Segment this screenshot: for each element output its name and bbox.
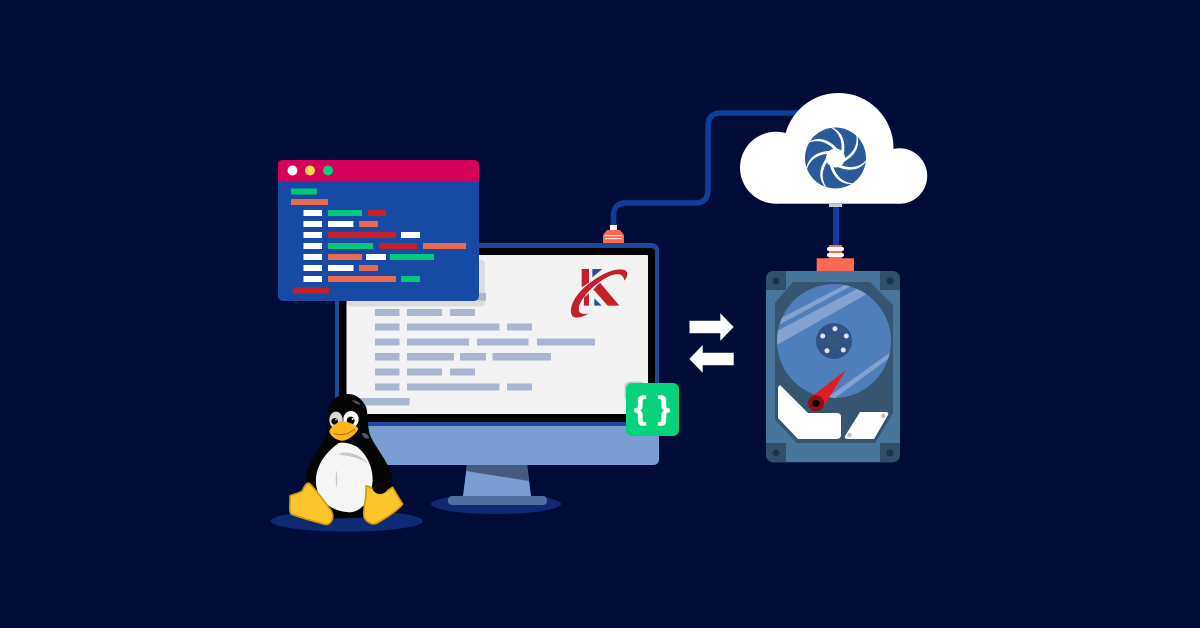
cable: cloud to hard drive <box>827 204 844 259</box>
window buttons <box>288 166 333 176</box>
cloud shape <box>740 93 927 204</box>
penguin left foot <box>290 483 333 524</box>
penguin <box>271 394 423 532</box>
window body <box>278 160 479 301</box>
penguin flipper tip <box>373 482 387 494</box>
corner mounts <box>766 271 900 462</box>
monitor screen <box>346 255 648 414</box>
screen text lines <box>355 293 595 406</box>
belly shading <box>335 453 368 488</box>
badge: curly braces: { } <box>634 390 671 426</box>
monitor stand <box>448 464 547 505</box>
logo: K with swoosh <box>571 269 627 318</box>
penguin beak <box>329 421 358 441</box>
magnet plate <box>845 412 888 439</box>
illustration: full scene <box>270 93 928 532</box>
monitor frame <box>335 243 659 426</box>
monitor bezel <box>339 248 655 422</box>
plug: monitor connector <box>603 225 624 243</box>
head highlights <box>352 400 369 439</box>
window title bar <box>278 160 479 181</box>
read arm <box>808 370 846 411</box>
penguin right foot <box>364 486 403 524</box>
badge: curly braces <box>624 382 679 436</box>
code window shadow <box>346 260 485 306</box>
penguin eyes <box>329 411 359 428</box>
cloud logo: swirl <box>801 122 872 192</box>
penguin belly <box>316 443 373 512</box>
penguin shadow <box>271 510 423 532</box>
code lines <box>291 188 466 294</box>
code window <box>278 160 479 301</box>
network cable: monitor to cloud <box>614 113 800 226</box>
drive connector <box>817 258 854 271</box>
drive case <box>766 271 900 462</box>
monitor base shadow <box>431 494 561 514</box>
platter <box>775 284 892 398</box>
cloud <box>740 93 927 204</box>
monitor <box>335 243 659 514</box>
hard drive <box>766 258 900 462</box>
arrow: right <box>690 313 734 341</box>
penguin body <box>306 394 392 519</box>
arrow: left <box>689 345 734 373</box>
actuator plate <box>778 385 841 439</box>
drive interior <box>775 282 893 443</box>
spindle hub <box>816 323 852 359</box>
